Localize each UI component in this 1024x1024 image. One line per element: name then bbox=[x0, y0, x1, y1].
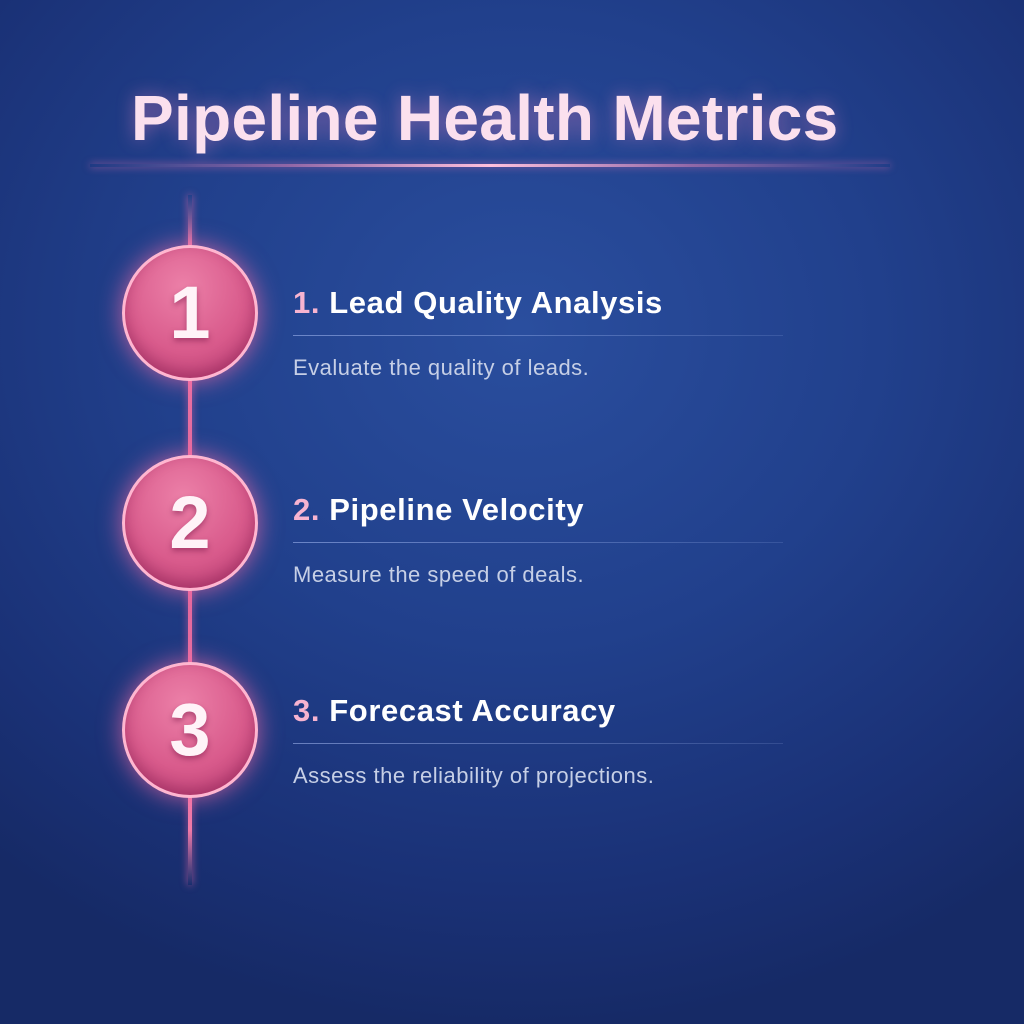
step 3 circle bbox=[122, 662, 258, 798]
step 2 circle: 2 bbox=[169, 481, 211, 564]
heading 2: 2. Pipeline Velocity bbox=[293, 492, 584, 527]
step 1 circle: 1 bbox=[169, 271, 211, 354]
timeline line bbox=[188, 195, 192, 885]
step 1 circle bbox=[122, 245, 258, 381]
item 1 text bbox=[293, 285, 783, 380]
step 2 circle bbox=[122, 455, 258, 591]
description 2: Measure the speed of deals. bbox=[293, 562, 584, 587]
item 2 text bbox=[293, 492, 783, 587]
heading 3: 3. Forecast Accuracy bbox=[293, 693, 616, 728]
step 3 circle: 3 bbox=[169, 688, 211, 771]
heading 1: 1. Lead Quality Analysis bbox=[293, 285, 663, 320]
description 3: Assess the reliability of projections. bbox=[293, 763, 654, 788]
title: Pipeline Health Metrics bbox=[131, 82, 839, 154]
item 3 text bbox=[293, 693, 783, 788]
description 1: Evaluate the quality of leads. bbox=[293, 355, 589, 380]
